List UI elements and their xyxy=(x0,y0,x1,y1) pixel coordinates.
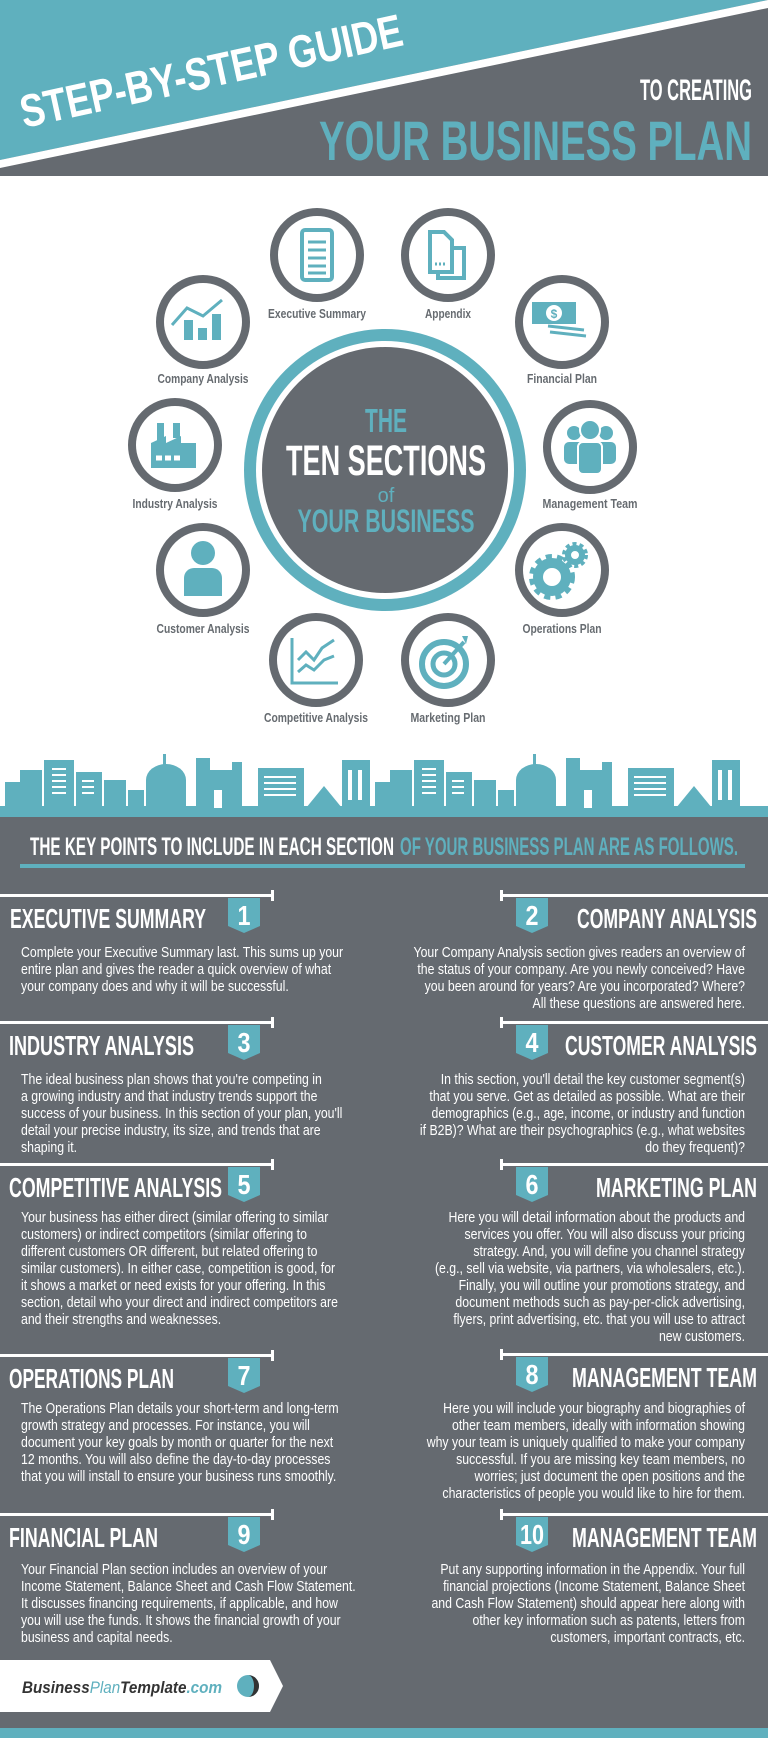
logo: BusinessPlanTemplate.com xyxy=(0,1660,283,1712)
section 6: marketing plan: new customers. xyxy=(659,1328,745,1344)
section 7: operations plan: 7 xyxy=(238,1360,250,1391)
central circle: ten sections: of xyxy=(378,485,395,507)
icon: management team: Management Team xyxy=(542,496,638,511)
section 6: marketing plan: Here you will detail information about the products and xyxy=(449,1209,745,1225)
section 5: competitive analysis: different customers OR different, but related offering to xyxy=(21,1243,318,1259)
icon: industry analysis: Industry Analysis xyxy=(132,496,218,511)
section 6: marketing plan: flyers, print advertising, etc. that you will use to attract xyxy=(453,1311,745,1327)
icon: company analysis xyxy=(158,279,248,386)
central circle: ten sections xyxy=(244,329,526,611)
section 9: financial plan: business and capital needs. xyxy=(21,1629,173,1645)
section 6: marketing plan: (e.g., sell via website, via partners, via wholesalers, etc.). xyxy=(435,1260,745,1276)
section 4: customer analysis: if B2B)? What are their psychographics (e.g., what websites xyxy=(420,1122,745,1138)
section 6: marketing plan: document methods such as pay-per-click advertising, xyxy=(455,1294,745,1310)
section 7: operations plan: The Operations Plan details your short-term and long-term xyxy=(21,1400,339,1416)
header banner xyxy=(0,0,768,176)
section 8: management team: why your team is uniquely qualified to make your company xyxy=(426,1434,745,1450)
section 10: appendix: other key information such as patents, letters from xyxy=(472,1612,745,1628)
section 9: financial plan: 9 xyxy=(238,1519,250,1550)
section 3: industry analysis: The ideal business plan shows that you're competing in xyxy=(21,1071,322,1087)
section 3: industry analysis xyxy=(0,1017,342,1155)
section 10: appendix xyxy=(431,1509,768,1645)
section 7: operations plan: 12 months. You will also define the day-to-day processes xyxy=(21,1451,331,1467)
section 6: marketing plan: 6 xyxy=(526,1169,538,1200)
section 7: operations plan: that you will install to ensure your business runs smoothly. xyxy=(21,1468,336,1484)
section 9: financial plan: Your Financial Plan section includes an overview of your xyxy=(21,1561,328,1577)
section 3: industry analysis: shaping it. xyxy=(21,1139,77,1155)
section 4: customer analysis: that you serve. Get as detailed as possible. What are their xyxy=(429,1088,745,1104)
section 4: customer analysis: do they frequent)? xyxy=(645,1139,745,1155)
section 2: company analysis xyxy=(414,890,768,1011)
section 8: management team: Here you will include your biography and biographies of xyxy=(443,1400,745,1416)
icon: executive summary: Executive Summary xyxy=(268,306,367,321)
section 5: competitive analysis: it shows a market or need exists for your offering. In this xyxy=(21,1277,326,1293)
section 7: operations plan xyxy=(0,1350,339,1484)
icon: management team xyxy=(542,404,638,511)
section 3: industry analysis: a growing industry and that industry trends support the xyxy=(21,1088,318,1104)
icon: appendix: Appendix xyxy=(425,306,472,321)
central circle: ten sections: TEN SECTIONS xyxy=(286,437,486,485)
section 1: executive summary xyxy=(0,890,343,994)
section 1: executive summary: EXECUTIVE SUMMARY xyxy=(10,903,206,934)
section 5: competitive analysis: 5 xyxy=(238,1169,250,1200)
section 7: operations plan: growth strategy and processes. For instance, you will xyxy=(21,1417,310,1433)
section 8: management team: successful. If you are missing key team members, no xyxy=(456,1451,745,1467)
section 7: operations plan: document your key goals by month or quarter for the next xyxy=(21,1434,333,1450)
section 8: management team: characteristics of people you would like to hire for them. xyxy=(442,1485,745,1501)
icon: financial plan: Financial Plan xyxy=(527,371,597,386)
section 10: appendix: 10 xyxy=(520,1519,544,1550)
icon: operations plan: Operations Plan xyxy=(522,621,602,636)
section 4: customer analysis: 4 xyxy=(526,1027,539,1058)
section 2: company analysis: the status of your company. Are you newly conceived? Have xyxy=(417,961,745,977)
section 6: marketing plan: Finally, you will outline your promotions strategy, and xyxy=(459,1277,745,1293)
section 4: customer analysis: In this section, you'll detail the key customer segment(s) xyxy=(441,1071,745,1087)
section 2: company analysis: Your Company Analysis section gives readers an overview of xyxy=(414,944,745,960)
section 5: competitive analysis: and their strengths and weaknesses. xyxy=(21,1311,221,1327)
icon: marketing plan xyxy=(405,617,491,725)
section 10: appendix: and Cash Flow Statement) should appear here along with xyxy=(431,1595,745,1611)
section 10: appendix: Put any supporting information in the Appendix. Your full xyxy=(440,1561,745,1577)
icon: operations plan xyxy=(519,527,605,636)
section 3: industry analysis: 3 xyxy=(238,1027,250,1058)
dark content background xyxy=(0,817,768,1728)
key points heading: THE KEY POINTS TO INCLUDE IN EACH SECTION xyxy=(30,833,394,861)
section 2: company analysis: All these questions are answered here. xyxy=(533,995,745,1011)
central circle: ten sections: THE xyxy=(365,402,407,439)
icon: competitive analysis xyxy=(264,617,368,725)
section 9: financial plan: you will use the funds. It shows the financial growth of your xyxy=(21,1612,341,1628)
icon: company analysis: Company Analysis xyxy=(158,371,248,386)
section 3: industry analysis: INDUSTRY ANALYSIS xyxy=(9,1030,194,1061)
section 1: executive summary: your company does and why it will be successful. xyxy=(21,978,289,994)
icon: competitive analysis: Competitive Analysis xyxy=(264,710,368,725)
logo: BusinessPlanTemplate.com: BusinessPlanTemplate.com xyxy=(22,1678,222,1697)
section 6: marketing plan: strategy. And, you will define you channel strategy xyxy=(473,1243,745,1259)
section 8: management team: worries; just document the open positions and the xyxy=(474,1468,745,1484)
icon: marketing plan: Marketing Plan xyxy=(410,710,486,725)
section 6: marketing plan: services you offer. You will also discuss your pricing xyxy=(465,1226,745,1242)
section 4: customer analysis: demographics (e.g., age, income, or industry and function xyxy=(431,1105,745,1121)
section 6: marketing plan xyxy=(435,1159,768,1344)
section 5: competitive analysis: similar customers). In either case, competition is good, for xyxy=(21,1260,336,1276)
section 5: competitive analysis: COMPETITIVE ANALYSIS xyxy=(9,1172,222,1203)
section 1: executive summary: 1 xyxy=(238,900,250,931)
section 3: industry analysis: success of your business. In this section of your plan, you'll xyxy=(21,1105,342,1121)
section 1: executive summary: entire plan and gives the reader a quick overview of what xyxy=(21,961,331,977)
icon: financial plan: $ xyxy=(551,307,558,321)
icon: executive summary xyxy=(268,212,367,321)
key points heading xyxy=(20,833,745,868)
section 1: executive summary: Complete your Executive Summary last. This sums up your xyxy=(21,944,343,960)
section 9: financial plan: Income Statement, Balance Sheet and Cash Flow Statement. xyxy=(21,1578,356,1594)
icon: industry analysis xyxy=(132,402,218,511)
section 9: financial plan: FINANCIAL PLAN xyxy=(9,1522,158,1553)
skyline xyxy=(0,754,768,818)
section 5: competitive analysis: section, detail who your direct and indirect competitors are xyxy=(21,1294,338,1310)
bottom teal strip xyxy=(0,1728,768,1738)
section 10: appendix: customers, important contracts, etc. xyxy=(550,1629,745,1645)
section 2: company analysis: you been around for years? Are you incorporated? Where? xyxy=(425,978,745,994)
section 5: competitive analysis: customers) or indirect competitors (similar offering to xyxy=(21,1226,307,1242)
section 3: industry analysis: detail your precise industry, its size, and trends that are xyxy=(21,1122,321,1138)
icon: financial plan xyxy=(519,279,605,386)
section 2: company analysis: 2 xyxy=(526,900,538,931)
section 5: competitive analysis: Your business has either direct (similar offering to similar xyxy=(21,1209,329,1225)
icon: customer analysis: Customer Analysis xyxy=(156,621,250,636)
central circle: ten sections: YOUR BUSINESS xyxy=(298,503,474,539)
section 9: financial plan xyxy=(0,1509,356,1645)
section 4: customer analysis xyxy=(420,1017,768,1155)
icon: appendix xyxy=(405,212,491,321)
icon: customer analysis xyxy=(156,527,250,636)
section 5: competitive analysis xyxy=(0,1159,338,1327)
section 7: operations plan: OPERATIONS PLAN xyxy=(9,1363,174,1394)
section 8: management team: 8 xyxy=(526,1359,538,1390)
section 10: appendix: financial projections (Income Statement, Balance Sheet xyxy=(443,1578,745,1594)
section 8: management team: other team members, ideally with information showing xyxy=(452,1417,745,1433)
section 8: management team xyxy=(426,1349,768,1501)
section 9: financial plan: It discusses financing requirements, if applicable, and how xyxy=(21,1595,338,1611)
